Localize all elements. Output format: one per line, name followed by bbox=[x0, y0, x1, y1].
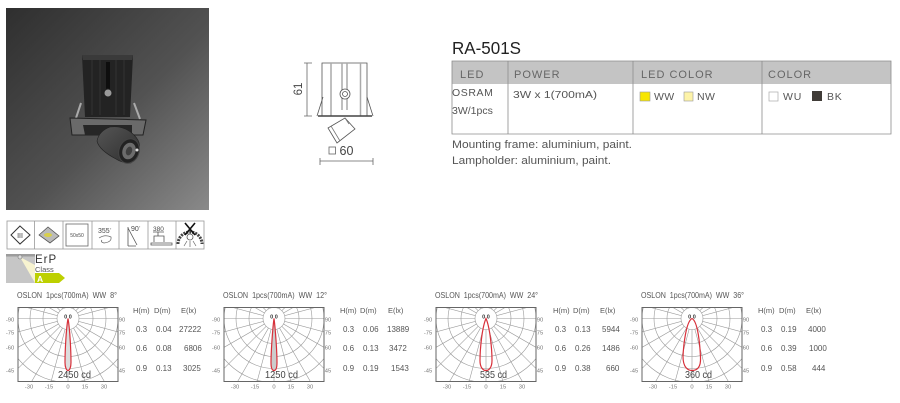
data table 12 degree: 1543 bbox=[391, 364, 409, 373]
icon: class III: III bbox=[17, 233, 23, 240]
specification table bbox=[452, 61, 891, 134]
data table 8 degree: 6806 bbox=[184, 344, 202, 353]
class arrow bbox=[35, 273, 65, 283]
polar diagram 24 degree bbox=[389, 222, 583, 403]
icon row: product feature icons bbox=[7, 221, 204, 249]
data table 24 degree: E(lx) bbox=[600, 306, 616, 315]
header labels: LED COLOR bbox=[641, 69, 714, 81]
data table 24 degree: H(m) bbox=[553, 306, 570, 315]
table outline and column rules bbox=[452, 61, 891, 134]
housing outline bbox=[322, 63, 367, 116]
data table 36 degree: 0.19 bbox=[781, 325, 797, 334]
data table 8 degree bbox=[133, 306, 202, 373]
polar diagram 12 degree: 1250 cd bbox=[265, 369, 298, 381]
housing colour swatches bbox=[769, 91, 843, 103]
ErP grey panel bbox=[6, 254, 35, 283]
spring clips bbox=[317, 97, 373, 116]
data table 36 degree: 444 bbox=[812, 364, 826, 373]
energy label: ErP class A bbox=[6, 254, 65, 284]
housing colour swatches: WU bbox=[783, 91, 802, 103]
height label: 61 bbox=[293, 83, 305, 95]
data table 36 degree: H(m) bbox=[758, 306, 775, 315]
chart: 36 degree beam: OSLON 1pcs(700mA) WW 36° bbox=[641, 291, 744, 300]
header labels: POWER bbox=[514, 69, 561, 81]
icon: cut-out size bbox=[66, 224, 88, 246]
LED cell: OSRAM bbox=[452, 87, 494, 99]
square symbol bbox=[329, 147, 336, 154]
data table 36 degree: 0.9 bbox=[761, 364, 773, 373]
frame opening bbox=[83, 125, 132, 135]
class letter: A bbox=[37, 274, 43, 284]
icon: tilt 90 degrees bbox=[128, 225, 141, 246]
data table 36 degree: 1000 bbox=[809, 344, 827, 353]
power cell: 3W x 1(700mA) bbox=[513, 89, 597, 101]
data table 36 degree: 0.6 bbox=[761, 344, 773, 353]
polar diagram 36 degree bbox=[595, 222, 789, 403]
icon: rotation 355 degrees: ° bbox=[110, 227, 112, 232]
data table 8 degree: H(m) bbox=[133, 306, 150, 315]
data table 12 degree: 0.3 bbox=[343, 325, 355, 334]
model title: RA-501S bbox=[452, 38, 521, 58]
dimension drawing bbox=[293, 63, 373, 165]
data table 24 degree: 0.13 bbox=[575, 325, 591, 334]
polar diagram 8 degree bbox=[0, 222, 165, 403]
light beam bbox=[20, 257, 35, 283]
material notes: Mounting frame: aluminium, paint. bbox=[452, 139, 632, 151]
data table 36 degree: D(m) bbox=[779, 306, 796, 315]
housing ribs bbox=[92, 60, 124, 115]
icon: LED chip bbox=[39, 227, 59, 243]
polar diagram 8 degree: 2450 cd bbox=[58, 369, 91, 381]
data table 8 degree: 0.3 bbox=[136, 325, 148, 334]
icon: installation depth: 380 bbox=[153, 226, 164, 233]
housing top lip bbox=[82, 55, 133, 60]
data table 12 degree: H(m) bbox=[340, 306, 357, 315]
data table 8 degree: 0.13 bbox=[156, 364, 172, 373]
data table 8 degree: 0.9 bbox=[136, 364, 148, 373]
data table 24 degree: D(m) bbox=[573, 306, 590, 315]
data table 36 degree: 0.3 bbox=[761, 325, 773, 334]
adjustment screw bbox=[104, 89, 112, 97]
data table 8 degree: 0.04 bbox=[156, 325, 172, 334]
header labels: LED bbox=[460, 69, 484, 81]
centre screw bbox=[340, 89, 350, 99]
data table 24 degree: 0.9 bbox=[555, 364, 567, 373]
polar diagram 12 degree bbox=[177, 222, 371, 403]
data table 12 degree: 0.13 bbox=[363, 344, 379, 353]
data table 8 degree: 0.08 bbox=[156, 344, 172, 353]
lamp head bbox=[97, 127, 139, 163]
data table 36 degree: 0.39 bbox=[781, 344, 797, 353]
data table 24 degree: 1486 bbox=[602, 344, 620, 353]
data table 24 degree: 0.3 bbox=[555, 325, 567, 334]
icon: rotation 355 degrees bbox=[98, 227, 112, 243]
housing colour swatches: BK bbox=[827, 91, 843, 103]
data table 24 degree: 0.26 bbox=[575, 344, 591, 353]
data table 8 degree: 3025 bbox=[183, 364, 201, 373]
header labels: COLOR bbox=[768, 69, 812, 81]
material notes bbox=[452, 139, 632, 167]
LED colour swatches bbox=[640, 91, 715, 103]
chart: 24 degree beam: OSLON 1pcs(700mA) WW 24° bbox=[435, 291, 538, 300]
LED cell bbox=[452, 87, 494, 117]
data table 12 degree: 3472 bbox=[389, 344, 407, 353]
data table 12 degree: 0.9 bbox=[343, 364, 355, 373]
lens centre bbox=[120, 141, 138, 161]
icon: installation depth bbox=[151, 226, 172, 245]
data table 12 degree: E(lx) bbox=[388, 306, 404, 315]
icon: rotation 355 degrees: 355 bbox=[98, 228, 110, 235]
data table 36 degree bbox=[758, 306, 827, 373]
class label: Class bbox=[35, 265, 54, 274]
chart: 36 degree beam bbox=[595, 222, 827, 403]
LED cell: 3W/1pcs bbox=[452, 105, 493, 117]
chart: 12 degree beam bbox=[177, 222, 410, 403]
polar diagram 36 degree: 360 cd bbox=[685, 369, 712, 381]
ErP heading: ErP bbox=[35, 254, 57, 266]
width label: 60 bbox=[340, 144, 353, 158]
chart: 24 degree beam bbox=[389, 222, 620, 403]
data table 24 degree: 0.38 bbox=[575, 364, 591, 373]
material notes: Lampholder: aluminium, paint. bbox=[452, 155, 611, 167]
housing ribs bbox=[331, 63, 360, 116]
polar diagram 24 degree: 535 cd bbox=[480, 369, 507, 381]
mounting frame bbox=[70, 118, 146, 135]
data table 12 degree: 0.19 bbox=[363, 364, 379, 373]
data table 24 degree: 5944 bbox=[602, 325, 620, 334]
icon: class III bbox=[11, 226, 30, 244]
data table 24 degree: 660 bbox=[606, 364, 620, 373]
icon: tilt 90 degrees: 90 bbox=[131, 226, 139, 233]
chart: 8 degree beam: OSLON 1pcs(700mA) WW 8° bbox=[17, 291, 117, 300]
data table 8 degree: E(lx) bbox=[181, 306, 197, 315]
data table 8 degree: 27222 bbox=[179, 325, 202, 334]
chart: 12 degree beam: OSLON 1pcs(700mA) WW 12° bbox=[223, 291, 327, 300]
data table 36 degree: 0.58 bbox=[781, 364, 797, 373]
LED colour swatches: NW bbox=[697, 91, 715, 103]
data table 36 degree: 4000 bbox=[808, 325, 826, 334]
fixture housing bbox=[82, 55, 133, 117]
data table 12 degree: 0.6 bbox=[343, 344, 355, 353]
lamp head bbox=[328, 118, 355, 143]
icon: not coverable by insulation bbox=[178, 223, 202, 247]
data table 12 degree: D(m) bbox=[360, 306, 377, 315]
lamp lens bbox=[115, 136, 143, 166]
height dimension line bbox=[304, 63, 312, 116]
width dimension line bbox=[320, 158, 373, 165]
housing slot bbox=[106, 62, 110, 90]
spring clips bbox=[76, 103, 140, 119]
icon: cut-out size: 50x50 bbox=[70, 233, 84, 239]
table header band bbox=[452, 61, 891, 84]
data table 12 degree: 0.06 bbox=[363, 325, 379, 334]
data table 8 degree: 0.6 bbox=[136, 344, 148, 353]
data table 24 degree: 0.6 bbox=[555, 344, 567, 353]
icon: tilt 90 degrees: ° bbox=[139, 225, 141, 230]
header labels bbox=[460, 69, 812, 81]
flange bbox=[318, 115, 372, 117]
data table 8 degree: D(m) bbox=[154, 306, 171, 315]
data table 12 degree: 13889 bbox=[387, 325, 410, 334]
data table 12 degree bbox=[340, 306, 410, 373]
panel: product photo bbox=[6, 8, 209, 210]
data table 36 degree: E(lx) bbox=[806, 306, 822, 315]
chart: 8 degree beam bbox=[0, 222, 202, 403]
data table 24 degree bbox=[553, 306, 620, 373]
LED colour swatches: WW bbox=[654, 91, 675, 103]
